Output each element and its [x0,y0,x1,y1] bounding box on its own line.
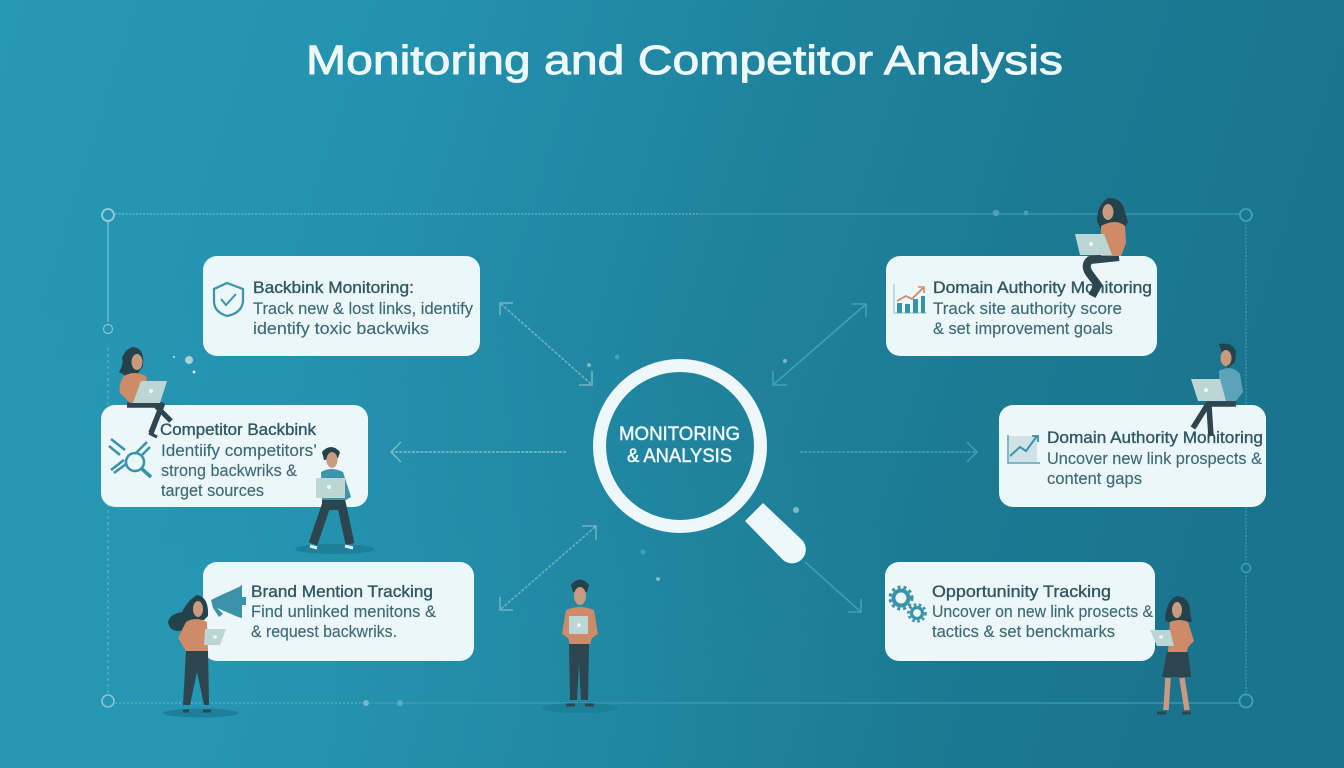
icon: line chart [1008,435,1040,463]
text: backlink monitoring: identify toxic backwiks [253,320,429,338]
text: domain authority lower: Domain Authority Monitoring [1047,429,1263,447]
magnifying glass [600,366,806,563]
icon: megaphone [211,585,246,618]
text: brand mention tracking: Find unlinked menitons & [251,603,436,621]
icon: growth chart [894,284,927,313]
text: competitor backlink: Identiify competitors’ [161,442,317,460]
text: competitor backlink: Competitor Backbink [160,421,317,439]
magnifier label: MONITORING [619,424,740,445]
arrow: bottom-left [500,526,596,610]
text: competitor backlink [160,421,317,500]
text: domain authority top: Domain Authority Monitoring [933,279,1152,297]
decorative dots [173,355,799,581]
text: domain authority top: & set improvement goals [933,320,1113,338]
person: standing man centre [542,580,618,713]
text: domain authority lower: content gaps [1047,470,1142,488]
person: seated man right [1191,344,1243,436]
text: opportunity tracking: tactics & set benckmarks [932,623,1115,641]
text: brand mention tracking [251,583,436,641]
panel: competitor backlink [101,405,368,507]
arrow: bottom-right [805,562,861,612]
text: backlink monitoring [253,279,474,338]
text: backlink monitoring: Backbink Monitoring: [253,279,414,297]
icon: links and magnifier [109,439,151,477]
person: standing with laptop [295,447,375,554]
panel: backlink monitoring [203,256,480,356]
panel: brand mention tracking [203,562,474,661]
person: seated woman top right [1075,198,1128,296]
text: brand mention tracking: Brand Mention Tracking [251,583,433,601]
magnifier label [619,424,740,467]
connector frame [102,209,1252,708]
person: standing woman with long hair [163,595,239,718]
panel: domain authority monitoring top [886,256,1157,356]
text: competitor backlink: target sources [161,482,264,500]
arrow: right [800,442,977,462]
panel: domain authority monitoring lower [999,405,1266,507]
title: Monitoring and Competitor Analysis [306,37,1063,83]
text: domain authority lower [1047,429,1263,488]
magnifier label: & ANALYSIS [627,446,732,467]
text: competitor backlink: strong backwriks & [161,462,297,480]
person: seated woman left [119,347,171,437]
text: opportunity tracking [932,583,1153,641]
icon: gears [890,587,926,622]
text: backlink monitoring: Track new & lost links, identify [253,300,474,318]
icon: shield [214,283,243,316]
person: standing woman right [1150,596,1194,713]
arrow: top-right [773,304,866,385]
text: domain authority lower: Uncover new link prospects & [1047,450,1262,468]
text: domain authority top: Track site authority score [933,300,1122,318]
arrow: left [391,442,566,462]
text: opportunity tracking: Opportuninity Tracking [932,583,1111,601]
panel: opportunity tracking [885,562,1155,661]
text: opportunity tracking: Uncover on new link prosects & [932,603,1153,621]
text: brand mention tracking: & request backwriks. [251,623,397,641]
text: domain authority top [933,279,1152,338]
arrow: top-left [500,303,592,385]
